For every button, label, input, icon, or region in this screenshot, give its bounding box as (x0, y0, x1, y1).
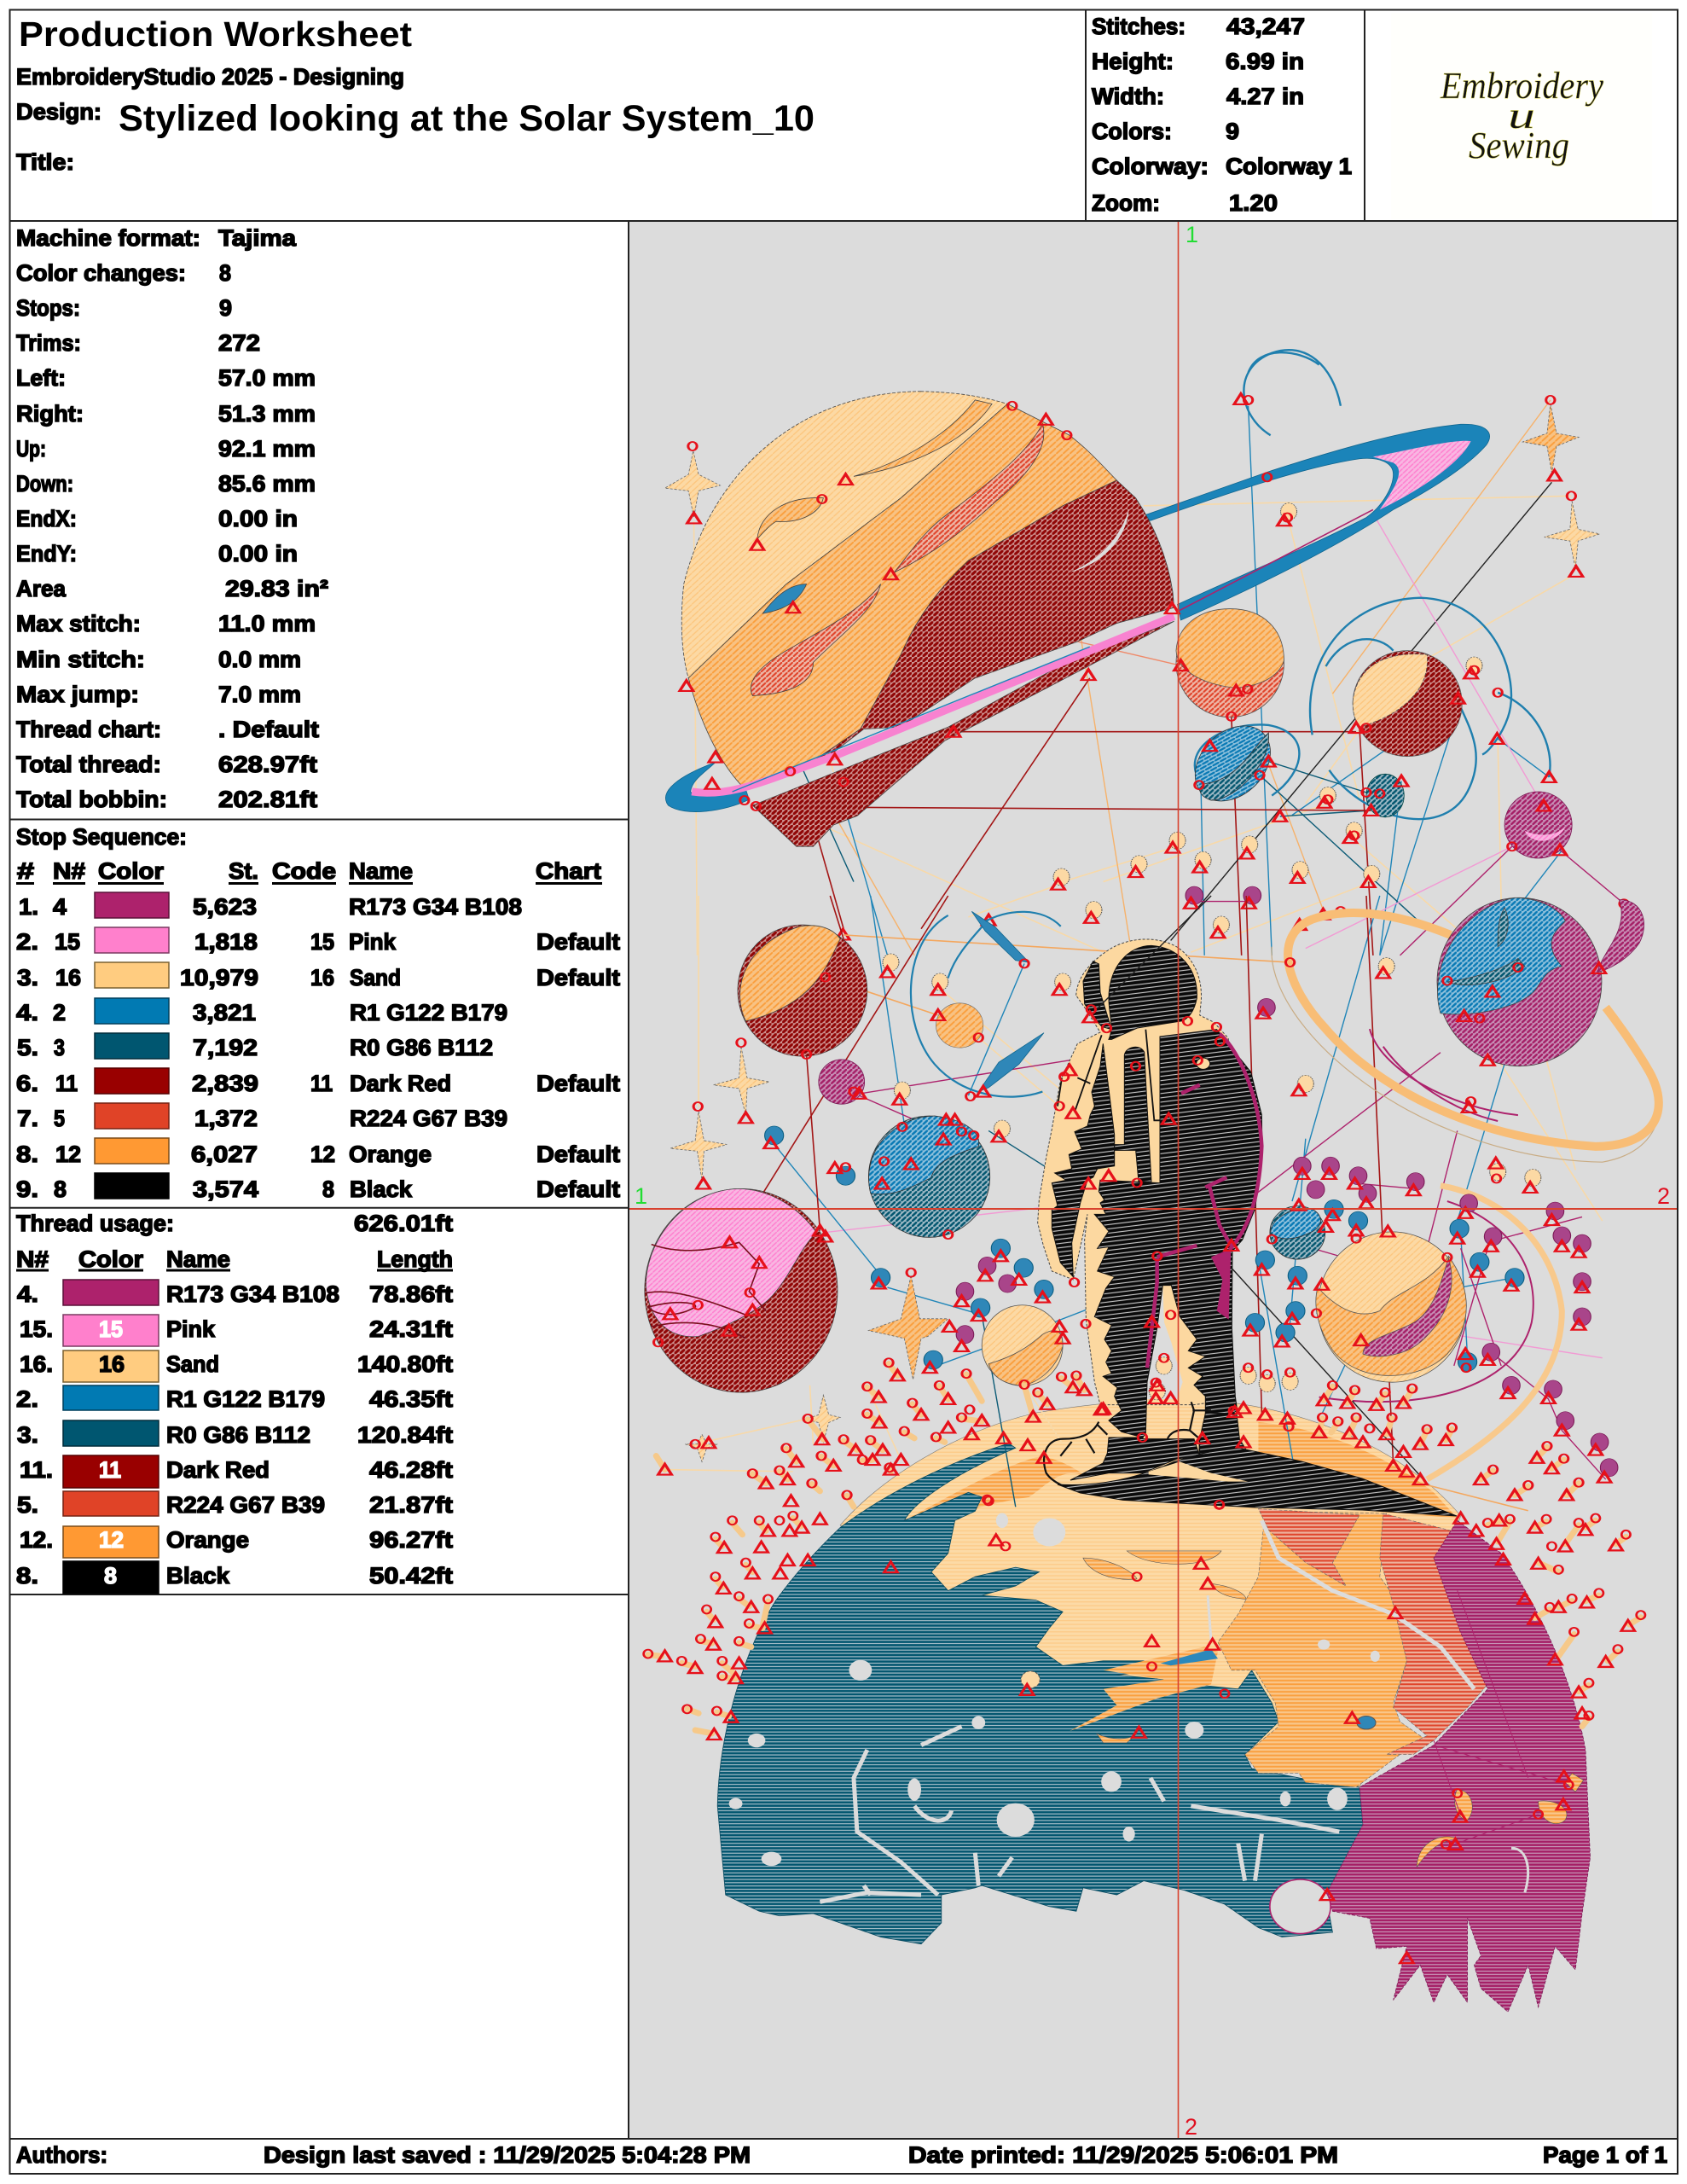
row 4: 4. (16, 1000, 38, 1025)
planet: sand and orange left (982, 1305, 1063, 1385)
row 2: 15 (310, 929, 334, 955)
planet dark red band (800, 480, 1174, 770)
panel: header titles (16, 15, 815, 175)
planet: blue and teal large (868, 1116, 990, 1237)
astronaut pack lines (1058, 1030, 1168, 1120)
panel: machine details: Total bobbin: (16, 787, 167, 812)
usage row 16: 16 (99, 1351, 125, 1377)
row 2: 15 (55, 929, 80, 955)
large orange ring (1272, 912, 1660, 1162)
row 7 (17, 1106, 507, 1131)
panel: machine details: Machine format: (16, 225, 200, 251)
mid art zone: small planets around astronaut (645, 896, 1660, 1511)
astronaut body and legs (1094, 1030, 1262, 1438)
panel: footer: Page 1 of 1 (1543, 2142, 1667, 2168)
table header: Color (98, 858, 165, 884)
usage row 4: R173 G34 B108 (166, 1281, 339, 1307)
earth cutouts (729, 1513, 1380, 1866)
panel: machine details: 11.0 mm (218, 611, 316, 636)
panel: design stats: Colorway 1 (1226, 154, 1352, 179)
row 8 (16, 1141, 620, 1167)
panel: design stats: Height: (1092, 49, 1174, 74)
panel: machine details (16, 225, 328, 812)
table header: Color (78, 1246, 144, 1272)
panel: machine details: 628.97ft (218, 752, 317, 777)
row 2: 2. (16, 929, 38, 955)
usage row 5: 21.87ft (369, 1492, 453, 1518)
earth orange region (1218, 1511, 1427, 1787)
usage row 3: R0 G86 B112 (166, 1422, 310, 1448)
color swatches (95, 892, 169, 1199)
ring pink band (692, 616, 1174, 793)
row 9 (16, 1176, 620, 1202)
second ring near sand planet (1319, 1186, 1562, 1479)
heading: Stop Sequence: (16, 824, 187, 850)
table header (16, 858, 602, 884)
usage row 11: 11 (99, 1457, 121, 1483)
panel: machine details: 85.6 mm (218, 471, 316, 497)
row 9: 3,574 (193, 1176, 258, 1202)
row 1 (19, 894, 522, 920)
panel: machine details: 8 (219, 260, 231, 286)
ring lower dark red (752, 621, 1174, 846)
usage row 12: 96.27ft (369, 1527, 453, 1553)
connector threads (665, 896, 1606, 1511)
panel: machine details: Stops: (16, 295, 80, 321)
row 6: 11 (310, 1071, 333, 1096)
panel: machine details: Down: (16, 471, 73, 497)
panel: machine details: 0.00 in (218, 541, 298, 566)
table header: Chart (536, 858, 601, 884)
usage row 8 (16, 1563, 453, 1589)
planet: small orange (936, 1003, 983, 1048)
planet: blue and magenta large (1437, 897, 1602, 1066)
ring left cap (665, 763, 749, 812)
astronaut shoes (1070, 1414, 1248, 1480)
panel: machine details: Left: (16, 365, 66, 391)
panel: machine details: 51.3 mm (218, 401, 316, 427)
panel: machine details: 29.83 in² (225, 576, 328, 601)
usage row 4: 4. (17, 1281, 38, 1307)
usage row 15: 24.31ft (369, 1316, 453, 1342)
small magenta moons (965, 1008, 1609, 1467)
ring right arc (1144, 424, 1489, 620)
panel: design stats: Colorway: (1092, 154, 1209, 179)
panel: machine details: . Default (218, 717, 319, 742)
usage row 8: 50.42ft (369, 1563, 453, 1589)
title: Production Worksheet (19, 15, 412, 54)
usage row 12: Orange (166, 1527, 249, 1553)
row 7: 1,372 (194, 1106, 258, 1131)
row 3: 16 (55, 965, 81, 990)
row 2: 1,818 (194, 929, 258, 955)
panel: design stats: Stitches: (1092, 14, 1186, 39)
planet: striped gas giant (665, 392, 1489, 846)
upper art zone: big ringed planet and small planets (665, 350, 1624, 956)
table header: Name (166, 1246, 230, 1272)
row 9: Black (350, 1176, 413, 1202)
panel: design stats: Zoom: (1092, 190, 1160, 216)
row 6 (16, 1071, 620, 1096)
logo: Embroidery N Sewing: u (1508, 95, 1535, 136)
planet orange band (688, 404, 1116, 790)
planet: sand and dark red (1353, 651, 1462, 757)
row 7: 7. (17, 1106, 38, 1131)
panel: machine details: Area (16, 576, 67, 601)
usage row 5: R224 G67 B39 (166, 1492, 325, 1518)
usage row 2: 46.35ft (369, 1386, 453, 1412)
usage row 15: 15 (99, 1316, 123, 1342)
row 1: 1. (19, 894, 38, 920)
row 5: 7,192 (193, 1035, 258, 1060)
row 1: 5,623 (193, 894, 257, 920)
panel: machine details: Total thread: (16, 752, 161, 777)
small blue moons (774, 1136, 1515, 1362)
usage row 12: 12 (99, 1527, 124, 1553)
usage row 5: 5. (17, 1492, 38, 1518)
usage row 16 (20, 1351, 453, 1377)
comet: magenta (1597, 900, 1644, 973)
usage row 3: 120.84ft (357, 1422, 453, 1448)
usage row 15: Pink (166, 1316, 216, 1342)
panel: design stats: 4.27 in (1226, 84, 1304, 109)
axis label: bottom 2: 2 (1185, 2114, 1197, 2140)
usage row 15: 15. (20, 1316, 53, 1342)
planet: orange and tomato (1176, 609, 1284, 717)
panel: machine details: Trims: (16, 330, 81, 356)
axis label: right 2: 2 (1657, 1183, 1670, 1209)
panel: machine details: Max jump: (16, 682, 139, 707)
row 4: R1 G122 B179 (350, 1000, 507, 1025)
row 5: 5. (17, 1035, 38, 1060)
table header: N# (53, 858, 85, 884)
panel: machine details: 272 (218, 330, 260, 356)
connector threads (694, 400, 1624, 956)
planet: sand and orange right (1316, 1232, 1466, 1382)
row 8: 12 (55, 1141, 81, 1167)
earth tomato region (1380, 1513, 1487, 1755)
earth cut lines (820, 1520, 1528, 1902)
panel: machine details: 202.81ft (218, 787, 317, 812)
panel: design stats (1092, 14, 1352, 216)
usage row 11 (20, 1457, 453, 1483)
row 6: Dark Red (350, 1071, 451, 1096)
panel: footer: Date printed: 11/29/2025 5:06:01 PM (908, 2142, 1338, 2168)
row 7: 5 (54, 1106, 65, 1131)
panel: embroidery preview (629, 221, 1678, 2140)
panel: design stats: Colors: (1092, 119, 1172, 144)
row 8: 12 (310, 1141, 335, 1167)
usage row 12: 12. (20, 1527, 53, 1553)
row 1: 4 (53, 894, 67, 920)
panel: design stats: 1.20 (1229, 190, 1278, 216)
markers: stitch stops and trims (665, 968, 1604, 1501)
usage row 11: 11. (20, 1457, 53, 1483)
table header: Length (377, 1246, 453, 1272)
row 5: R0 G86 B112 (350, 1035, 493, 1060)
row 3: 10,979 (180, 965, 258, 990)
usage row 16: 16. (20, 1351, 53, 1377)
small sand eggs (1062, 512, 1474, 925)
long black thread (1097, 896, 1427, 1484)
row 9: Default (536, 1176, 620, 1202)
crosshair axes (629, 221, 1678, 2140)
row 9: 9. (16, 1176, 38, 1202)
row 6: 6. (16, 1071, 38, 1096)
planet: blue and teal (1183, 721, 1283, 805)
scattered marker pills (656, 1364, 1579, 1507)
panel: machine details: 57.0 mm (218, 365, 316, 391)
panel: machine details: 0.00 in (218, 506, 298, 531)
markers: earth stitch stops (665, 1519, 1628, 1958)
table header: St. (229, 858, 258, 884)
usage row 2 (16, 1386, 453, 1412)
panel: machine details: 0.0 mm (218, 647, 301, 672)
axis label: left 1: 1 (635, 1183, 647, 1209)
ring pink tip (1373, 441, 1471, 509)
usage row 8: 8. (16, 1563, 38, 1589)
panel: footer (16, 2142, 1667, 2168)
row 9: 8 (322, 1176, 334, 1202)
row 8: Orange (349, 1141, 432, 1167)
astronaut sand suit (1038, 939, 1251, 1405)
row 2 (16, 929, 620, 955)
row 8: Default (536, 1141, 620, 1167)
panel: machine details: EndX: (16, 506, 77, 531)
row 6: 11 (55, 1071, 78, 1096)
usage row 3 (17, 1422, 453, 1448)
earth detail: teal circle (1357, 1716, 1376, 1729)
panel: machine details: Right: (16, 401, 84, 427)
small sand eggs (890, 962, 1533, 1391)
thread swatches (63, 1280, 159, 1594)
row 9: 8 (54, 1176, 67, 1202)
row 7: R224 G67 B39 (350, 1106, 507, 1131)
row 8: 8. (16, 1141, 38, 1167)
earth detail: magenta circle outline (1270, 1879, 1330, 1934)
marker pills (648, 1519, 1641, 1734)
astronaut shadow (1058, 1448, 1457, 1516)
astronaut gap between legs (1145, 1288, 1183, 1399)
usage row 3: 3. (17, 1422, 38, 1448)
earth orange blobs (1417, 1773, 1584, 1867)
total length: 626.01ft (354, 1211, 453, 1236)
earth sand dome (840, 1400, 1461, 1787)
usage row 15 (20, 1316, 453, 1342)
panel: thread usage (16, 1211, 453, 1594)
stars: sand (665, 404, 1600, 568)
planet: pink and dark red (645, 1188, 838, 1392)
panel: stop sequence (16, 824, 620, 1202)
usage row 4: 78.86ft (369, 1281, 453, 1307)
panel: machine details: EndY: (16, 541, 77, 566)
row 1: R173 G34 B108 (349, 894, 522, 920)
title label: Title: (16, 149, 74, 175)
panel: footer: Authors: (16, 2142, 107, 2168)
panel: design stats: Width: (1092, 84, 1164, 109)
table header: N# (16, 1246, 49, 1272)
row 3 (17, 965, 620, 990)
panel: design stats: 43,247 (1226, 14, 1305, 39)
table header: # (17, 858, 34, 884)
usage row 8: Black (166, 1563, 230, 1589)
earth planet surface (648, 1400, 1641, 2012)
astronaut visor glint (1197, 1058, 1210, 1069)
astronaut pack arch (1115, 1047, 1151, 1182)
planet: magenta moon (1504, 792, 1572, 858)
planet: small teal (1366, 774, 1404, 817)
panel: machine details: Min stitch: (16, 647, 145, 672)
usage row 16: Sand (166, 1351, 219, 1377)
panel: machine details: Up: (16, 436, 46, 462)
usage row 4 (17, 1281, 453, 1307)
astronaut magenta trim (1147, 1034, 1261, 1368)
panel: machine details: Tajima (218, 225, 297, 251)
panel: design stats: 6.99 in (1226, 49, 1304, 74)
usage row 8: 8 (104, 1563, 117, 1589)
panel: machine details: 7.0 mm (218, 682, 301, 707)
stars (670, 1047, 948, 1461)
usage row 2: R1 G122 B179 (166, 1386, 325, 1412)
row 3: Default (536, 965, 620, 990)
row 4: 2 (53, 1000, 66, 1025)
usage row 11: Dark Red (166, 1457, 270, 1483)
planet: orange and dark red (738, 925, 867, 1056)
panel: machine details: 9 (219, 295, 232, 321)
row 3: 3. (17, 965, 38, 990)
table header: Code (272, 858, 336, 884)
earth teal region (717, 1443, 1363, 1944)
earth sand details (1161, 1649, 1218, 1665)
earth orange crest (904, 1457, 1090, 1520)
mid art zone: moons and markers (656, 896, 1609, 1507)
astronaut arm (1052, 1043, 1115, 1277)
planet sand cap (681, 392, 1007, 678)
arcs and comets near small planets (911, 912, 1061, 1097)
panel: footer: Design last saved : 11/29/2025 5:04:28 PM (264, 2142, 751, 2168)
arcs: blue orbit lines (1195, 350, 1551, 819)
logo: Embroidery N Sewing: Sewing (1469, 125, 1569, 166)
astronaut boots (1167, 1430, 1200, 1455)
panel: machine details: 92.1 mm (218, 436, 316, 462)
table header: Name (349, 858, 413, 884)
axis label: top 1: 1 (1186, 222, 1198, 247)
row 2: Pink (349, 929, 397, 955)
astronaut (1038, 939, 1457, 1516)
usage row 12 (20, 1527, 453, 1553)
usage row 16: 140.80ft (357, 1351, 453, 1377)
software line: EmbroideryStudio 2025 - Designing (16, 64, 404, 90)
row 5 (17, 1035, 493, 1060)
logo: Embroidery N Sewing (1391, 13, 1652, 219)
planet: small magenta (819, 1060, 865, 1104)
panel: machine details: Color changes: (16, 260, 186, 286)
row 4 (16, 1000, 507, 1025)
row 6: 2,839 (192, 1071, 258, 1096)
earth magenta region (1326, 1520, 1591, 2012)
row 2: Default (536, 929, 620, 955)
markers: stitch stops and trims (687, 399, 1576, 951)
design name: Stylized looking at the Solar System_10 (119, 98, 815, 139)
usage row 11: 46.28ft (369, 1457, 453, 1483)
usage row 2: 2. (16, 1386, 38, 1412)
row 3: 16 (310, 965, 334, 990)
row 3: Sand (350, 965, 401, 990)
panel: design stats: 9 (1226, 119, 1239, 144)
planet: blue small right (1270, 1206, 1325, 1259)
logo: Embroidery N Sewing: Embroidery (1440, 65, 1603, 107)
panel: machine details: Max stitch: (16, 611, 141, 636)
row 8: 6,027 (191, 1141, 258, 1167)
heading: Thread usage: (16, 1211, 174, 1236)
design label: Design: (16, 99, 101, 125)
row 4: 3,821 (193, 1000, 256, 1025)
usage row 5 (17, 1492, 453, 1518)
row 5: 3 (54, 1035, 65, 1060)
panel: machine details: Thread chart: (16, 717, 161, 742)
astronaut helmet (1109, 945, 1197, 1039)
table header (16, 1246, 453, 1272)
row 6: Default (536, 1071, 620, 1096)
